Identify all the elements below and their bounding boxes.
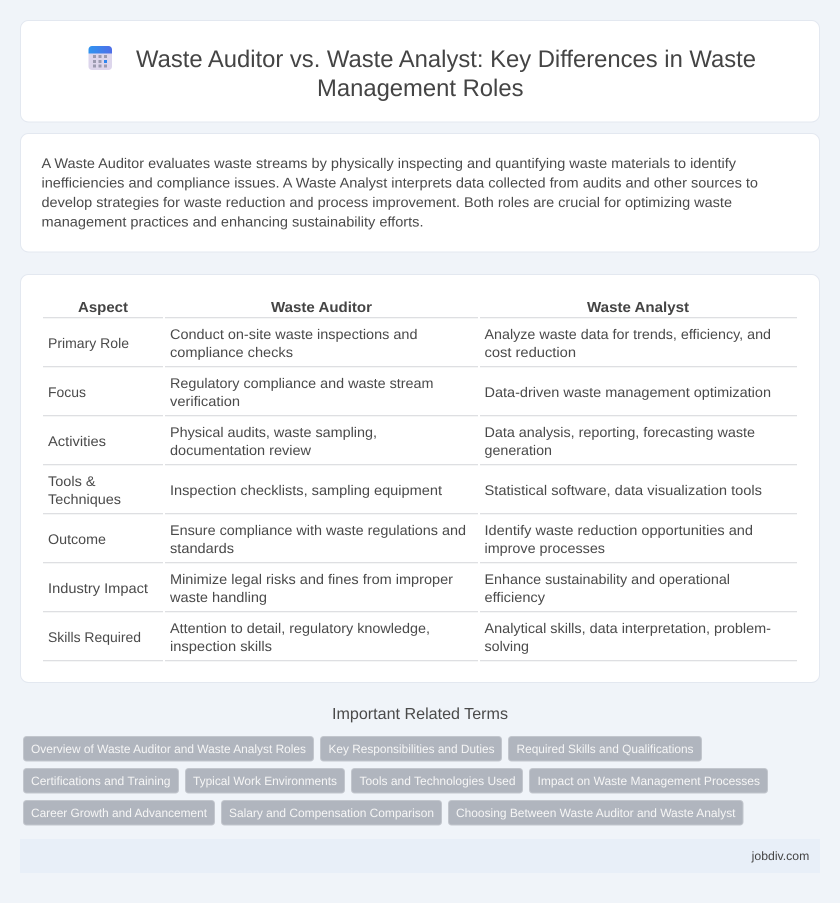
row: outcome: Ensure compliance with waste regulations and: [170, 522, 466, 538]
row: skills required: Attention to detail, regulatory knowledge,: [170, 620, 430, 636]
tag: [24, 768, 178, 793]
row: tools and techniques: Inspection checklists, sampling equipment: [170, 482, 442, 498]
row: activities: [48, 424, 755, 458]
tag: Certifications and Training: [31, 774, 170, 788]
row: primary role: Conduct on-site waste inspections and: [170, 326, 418, 342]
row: primary role: compliance checks: [170, 344, 293, 360]
icon: calendar: [88, 46, 112, 70]
table grid lines: [43, 317, 797, 661]
row: industry impact: Minimize legal risks and fines from improper: [170, 571, 453, 587]
panel: summary: [20, 134, 820, 252]
tag: [186, 768, 344, 793]
row: skills required: [48, 620, 771, 654]
row: activities: documentation review: [170, 442, 312, 458]
summary text: [42, 155, 758, 230]
row: focus: Data-driven waste management optimization: [484, 384, 771, 400]
summary text: develop strategies for waste reduction and process improvement. Both roles are crucial for optimizing waste: [42, 194, 732, 210]
row: primary role: Analyze waste data for trends, efficiency, and: [484, 326, 771, 342]
table header row: [78, 300, 689, 316]
title: [136, 46, 756, 102]
tag: [508, 736, 702, 761]
row: tools and techniques: [48, 473, 762, 507]
title: Waste Auditor vs. Waste Analyst: Key Differences in Waste: [136, 46, 756, 73]
panel: comparison table: [20, 274, 820, 682]
panel: header: [20, 20, 820, 122]
tag: Required Skills and Qualifications: [516, 742, 694, 756]
row: skills required: inspection skills: [170, 638, 272, 654]
table header row: Waste Auditor: [271, 300, 372, 316]
row: focus: Focus: [48, 384, 86, 400]
summary text: management practices and enhancing sustainability efforts.: [42, 214, 424, 230]
tag: Impact on Waste Management Processes: [538, 774, 760, 788]
row: primary role: cost reduction: [484, 344, 576, 360]
footer bar: [20, 839, 820, 873]
tag: Salary and Compensation Comparison: [229, 806, 434, 820]
row: outcome: improve processes: [484, 540, 605, 556]
row: focus: [48, 375, 771, 409]
row: tools and techniques: Tools &: [48, 473, 96, 489]
row: industry impact: [48, 571, 730, 605]
row: focus: verification: [170, 393, 240, 409]
row: tools and techniques: Techniques: [48, 491, 121, 507]
row: outcome: standards: [170, 540, 234, 556]
row: skills required: Skills Required: [48, 629, 141, 645]
tag: [24, 800, 214, 825]
row: outcome: Identify waste reduction opportunities and: [484, 522, 753, 538]
row: primary role: [48, 326, 771, 360]
table header row: Waste Analyst: [587, 300, 689, 316]
row: activities: Data analysis, reporting, forecasting waste: [484, 424, 755, 440]
row: industry impact: Industry Impact: [48, 580, 148, 596]
row: activities: Physical audits, waste sampling,: [170, 424, 377, 440]
row: activities: Activities: [48, 433, 106, 449]
tag: [24, 736, 314, 761]
title: Management Roles: [317, 75, 524, 102]
row: industry impact: Enhance sustainability and operational: [484, 571, 730, 587]
row: skills required: solving: [484, 638, 529, 654]
tag: Tools and Technologies Used: [360, 774, 516, 788]
row: industry impact: waste handling: [169, 589, 267, 605]
tag: [530, 768, 768, 793]
tag: Career Growth and Advancement: [31, 806, 208, 820]
row: primary role: Primary Role: [48, 335, 129, 351]
row: focus: Regulatory compliance and waste stream: [170, 375, 434, 391]
summary text: A Waste Auditor evaluates waste streams by physically inspecting and quantifying waste materials to identify: [42, 155, 736, 171]
tag: Typical Work Environments: [193, 774, 337, 788]
row: activities: generation: [484, 442, 552, 458]
row: industry impact: efficiency: [484, 589, 545, 605]
tag: [320, 736, 502, 761]
table header row: Aspect: [78, 300, 128, 316]
tag: [222, 800, 442, 825]
tag: [352, 768, 522, 793]
row: outcome: Outcome: [48, 531, 106, 547]
footer source: jobdiv.com: [751, 849, 809, 863]
tag: Overview of Waste Auditor and Waste Analyst Roles: [31, 742, 306, 756]
heading: related terms: Important Related Terms: [332, 706, 508, 723]
tag: Key Responsibilities and Duties: [328, 742, 494, 756]
row: tools and techniques: Statistical software, data visualization tools: [484, 482, 762, 498]
row: outcome: [48, 522, 753, 556]
tag: [448, 800, 743, 825]
summary text: inefficiencies and compliance issues. A Waste Analyst interprets data collected from audits and other sources to: [42, 174, 758, 190]
related term tags: [24, 736, 768, 825]
tag: Choosing Between Waste Auditor and Waste Analyst: [456, 806, 736, 820]
row: skills required: Analytical skills, data interpretation, problem-: [484, 620, 771, 636]
